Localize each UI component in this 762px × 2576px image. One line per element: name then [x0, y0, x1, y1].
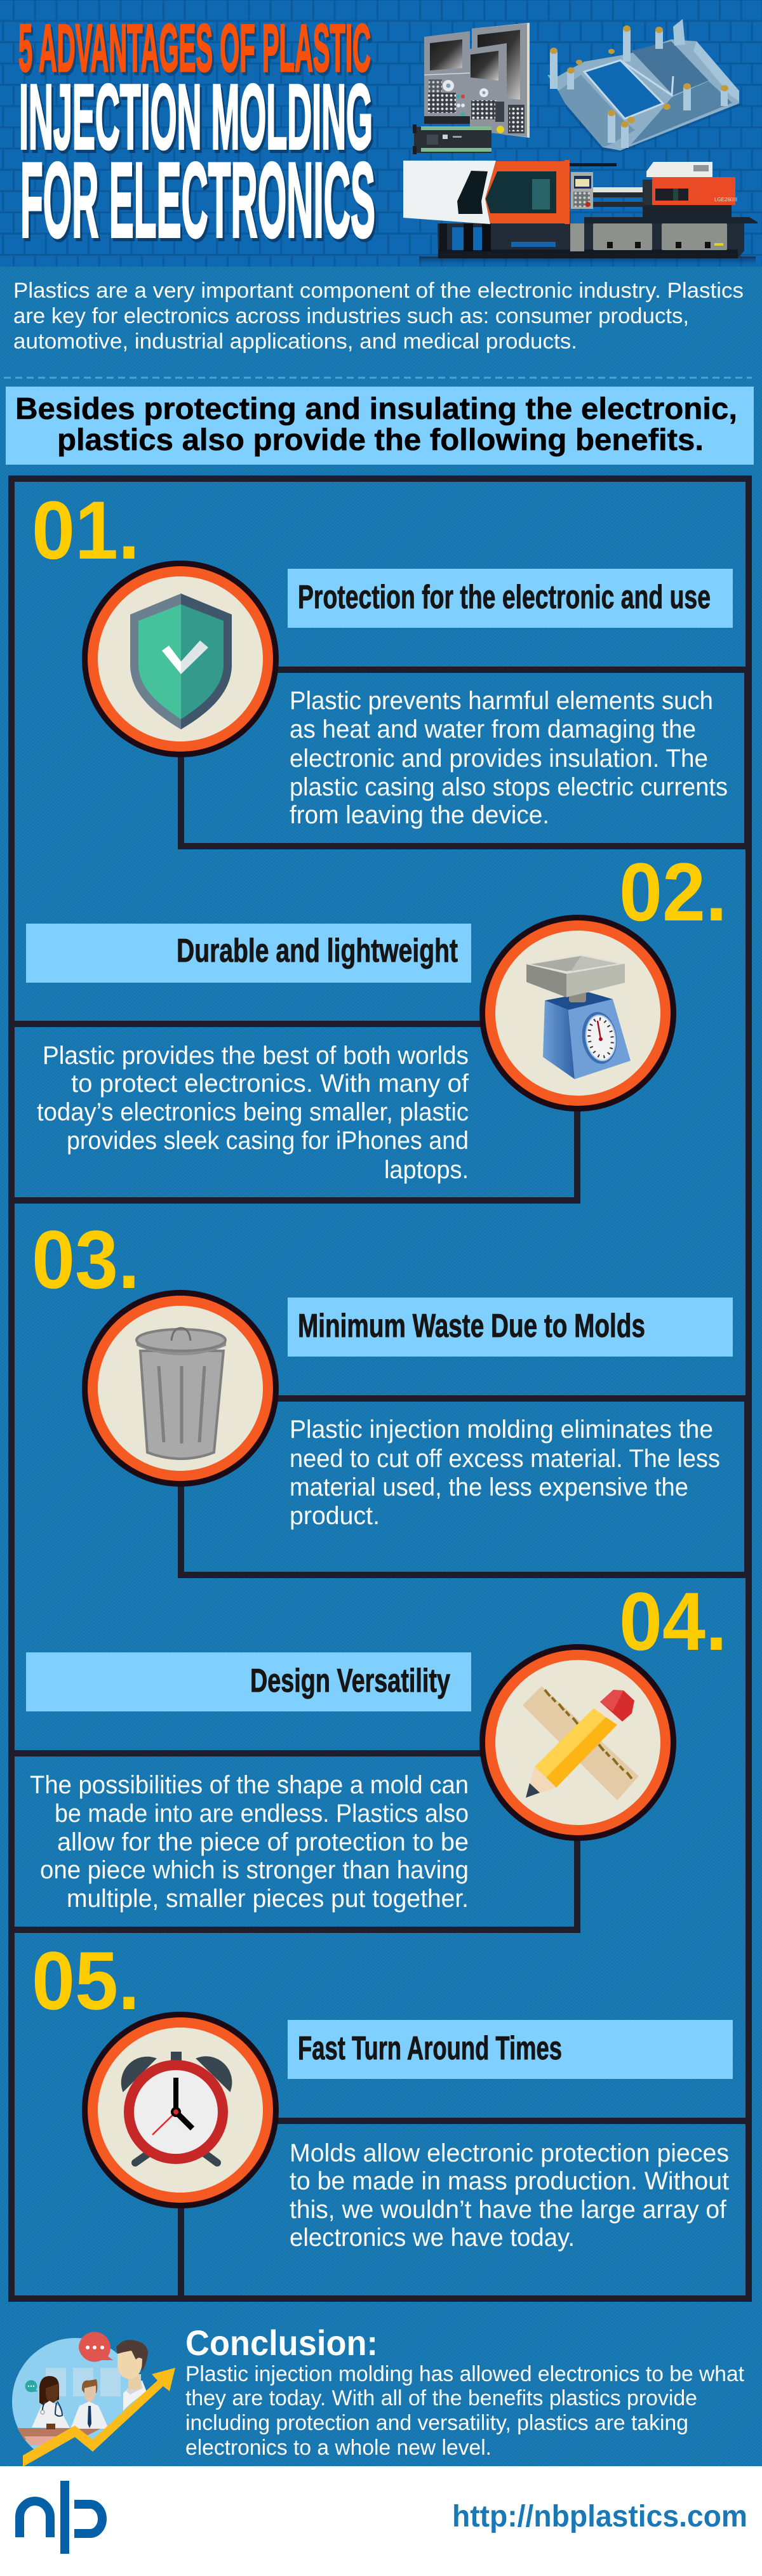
section 05: [32, 1934, 752, 2302]
icon: shield: [82, 561, 279, 757]
section 02: [8, 846, 727, 1204]
conclusion text: Plastic injection molding has allowed electronics to be what: [185, 2362, 745, 2386]
outer frame: [8, 475, 752, 2302]
text 04: one piece which is stronger than having: [40, 1856, 469, 1884]
man in foreground: [123, 2380, 147, 2411]
website url: http://nbplastics.com: [452, 2500, 747, 2533]
heading 02: Durable and lightweight: [177, 933, 458, 969]
connector lines 05: [178, 2118, 752, 2302]
section 01: [32, 484, 752, 849]
image: control panels: [424, 23, 530, 138]
connector lines 02: [8, 1021, 580, 1204]
footer: [0, 2466, 762, 2576]
text 01: Plastic prevents harmful elements such: [290, 687, 713, 715]
man at desk: [82, 2379, 98, 2393]
connector lines 04: [8, 1750, 580, 1933]
text 02: to protect electronics. With many of: [71, 1070, 469, 1098]
benefits banner: [6, 387, 754, 465]
heading 04: [26, 1652, 471, 1711]
number 04: 04.: [619, 1575, 727, 1668]
intro paragraph: [13, 279, 744, 354]
number 01: 01.: [32, 484, 140, 576]
text 03: [290, 1416, 720, 1530]
text 04: The possibilities of the shape a mold can: [30, 1771, 469, 1799]
icon: trash can: [82, 1290, 279, 1487]
image: clear plastic electronics housing: [547, 19, 743, 152]
intro paragraph: automotive, industrial applications, and medical products.: [13, 329, 577, 354]
text 05: electronics we have today.: [290, 2224, 575, 2252]
text 01: plastic casing also stops electric currents: [290, 773, 728, 801]
text 02: [37, 1042, 469, 1184]
intro paragraph: Plastics are a very important component of the electronic industry. Plastics: [13, 279, 744, 303]
conclusion text: Conclusion:: [185, 2323, 378, 2363]
number 05: 05.: [32, 1934, 140, 2027]
icon: alarm clock: [82, 2012, 279, 2208]
conclusion text: electronics to a whole new level.: [185, 2436, 491, 2460]
speech bubbles: [25, 2332, 113, 2392]
heading 03: Minimum Waste Due to Molds: [298, 1308, 645, 1344]
text 01: as heat and water from damaging the: [290, 715, 696, 743]
intro paragraph: are key for electronics across industries such as: consumer products,: [13, 304, 689, 328]
conclusion illustration: [12, 2332, 175, 2467]
heading 03: [288, 1298, 733, 1357]
text 03: material used, the less expensive the: [290, 1473, 688, 1501]
section 04: [8, 1575, 727, 1933]
text 05: Molds allow electronic protection pieces: [290, 2139, 729, 2167]
heading 02: [26, 924, 471, 983]
title: [18, 11, 375, 260]
number 02: 02.: [619, 846, 727, 938]
heading 01: [288, 569, 733, 628]
image: injection molding machine: LGE260III: [714, 197, 737, 202]
text 04: multiple, smaller pieces put together.: [67, 1885, 469, 1913]
text 01: from leaving the device.: [290, 801, 549, 829]
benefits banner: plastics also provide the following benefits.: [57, 423, 704, 457]
number 03: 03.: [32, 1213, 140, 1306]
conclusion text: including protection and versatility, plastics are taking: [185, 2411, 688, 2435]
text 02: laptops.: [384, 1156, 469, 1184]
text 01: electronic and provides insulation. The: [290, 745, 708, 773]
text 02: provides sleek casing for iPhones and: [67, 1127, 469, 1155]
heading 04: Design Versatility: [250, 1663, 450, 1699]
image: injection molding machine: [403, 160, 758, 267]
conclusion text: [185, 2323, 745, 2460]
text 03: need to cut off excess material. The less: [290, 1445, 720, 1473]
connector lines 03: [178, 1395, 752, 1578]
benefits banner: Besides protecting and insulating the electronic,: [15, 392, 737, 426]
text 04: be made into are endless. Plastics also: [55, 1800, 469, 1828]
text 05: to be made in mass production. Without: [290, 2167, 729, 2195]
text 05: [290, 2139, 729, 2252]
text 04: allow for the piece of protection to be: [57, 1828, 469, 1856]
connector lines 01: [178, 667, 752, 849]
icon: kitchen scale: [479, 915, 676, 1112]
text 02: Plastic provides the best of both worlds: [43, 1042, 469, 1070]
heading 05: Fast Turn Around Times: [298, 2030, 562, 2067]
logo: [20, 2481, 102, 2554]
icon: pencil and ruler: [479, 1644, 676, 1841]
text 04: [30, 1771, 469, 1913]
text 03: Plastic injection molding eliminates the: [290, 1416, 713, 1444]
header banner: [0, 0, 762, 267]
text 01: [290, 687, 728, 829]
conclusion text: they are today. With all of the benefits plastics provide: [185, 2386, 697, 2410]
text 03: product.: [290, 1502, 380, 1530]
woman: [39, 2376, 59, 2406]
text 05: this, we wouldn’t have the large array of: [290, 2196, 727, 2224]
image: PLC controller: [413, 124, 491, 154]
heading 05: [288, 2020, 733, 2079]
section 03: [32, 1213, 752, 1578]
text 02: today’s electronics being smaller, plastic: [37, 1098, 469, 1126]
rising arrow: [23, 2368, 175, 2467]
